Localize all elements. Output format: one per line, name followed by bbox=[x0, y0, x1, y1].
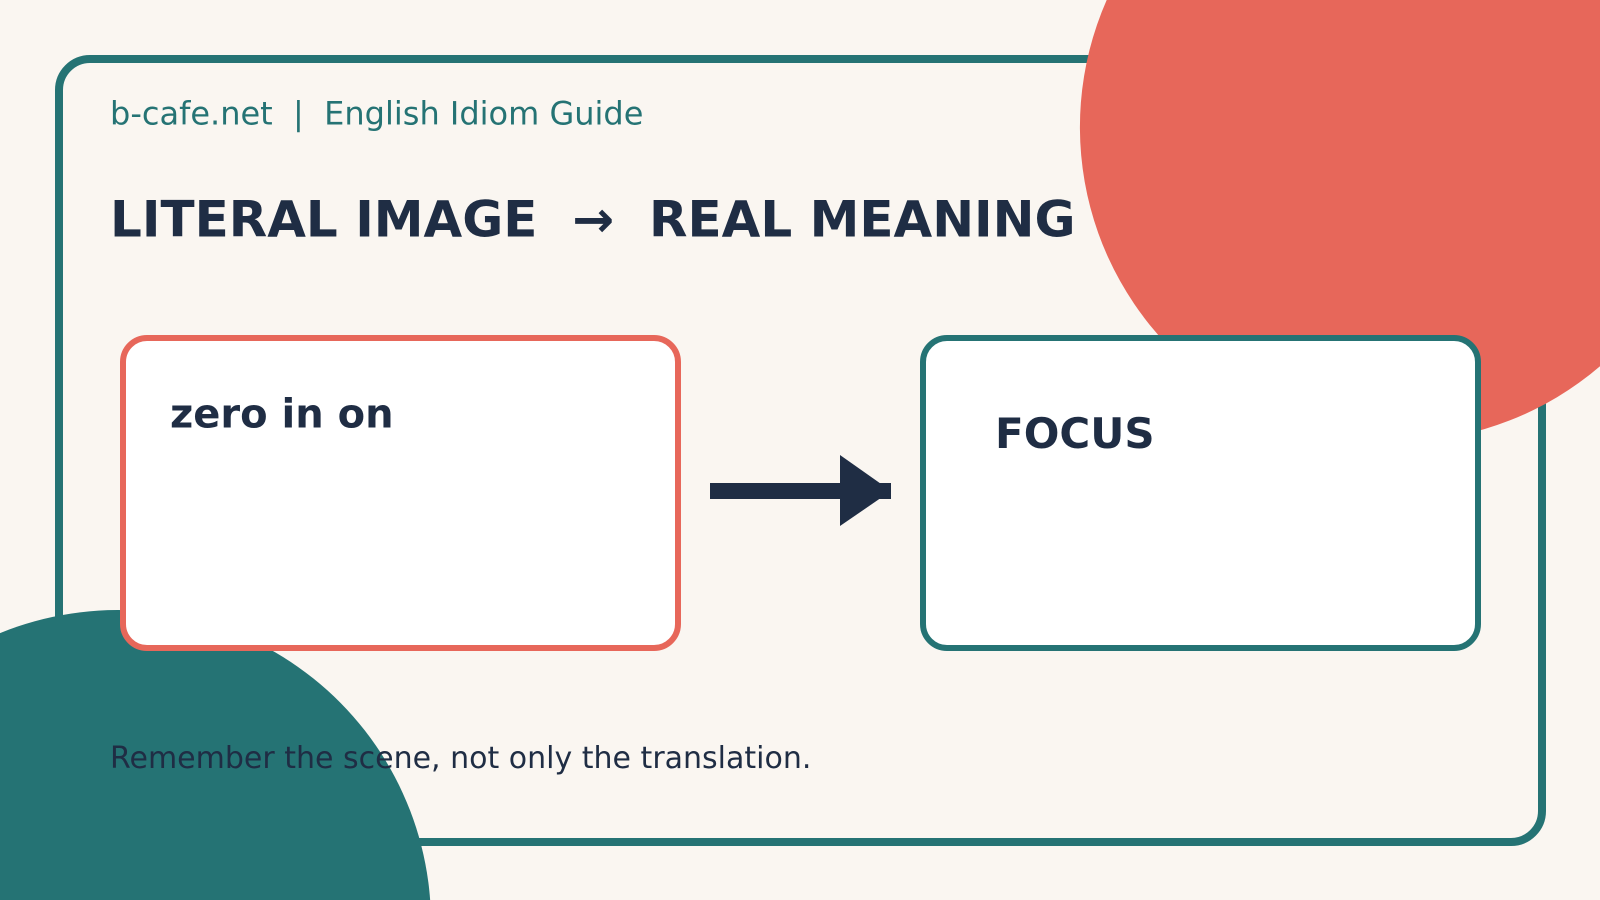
footer note: Remember the scene, not only the translation. bbox=[110, 741, 811, 776]
idiom text: zero in on bbox=[170, 392, 394, 438]
site header: b-cafe.net | English Idiom Guide bbox=[110, 94, 643, 132]
panel: meaning card bbox=[923, 338, 1478, 648]
arrow bbox=[710, 455, 891, 526]
panel: literal idiom card bbox=[123, 338, 678, 648]
decorative teal circle bbox=[0, 610, 430, 900]
decorative coral circle bbox=[1080, 0, 1600, 442]
meaning text: FOCUS bbox=[995, 409, 1155, 458]
title: LITERAL IMAGE → REAL MEANING bbox=[110, 190, 1076, 248]
